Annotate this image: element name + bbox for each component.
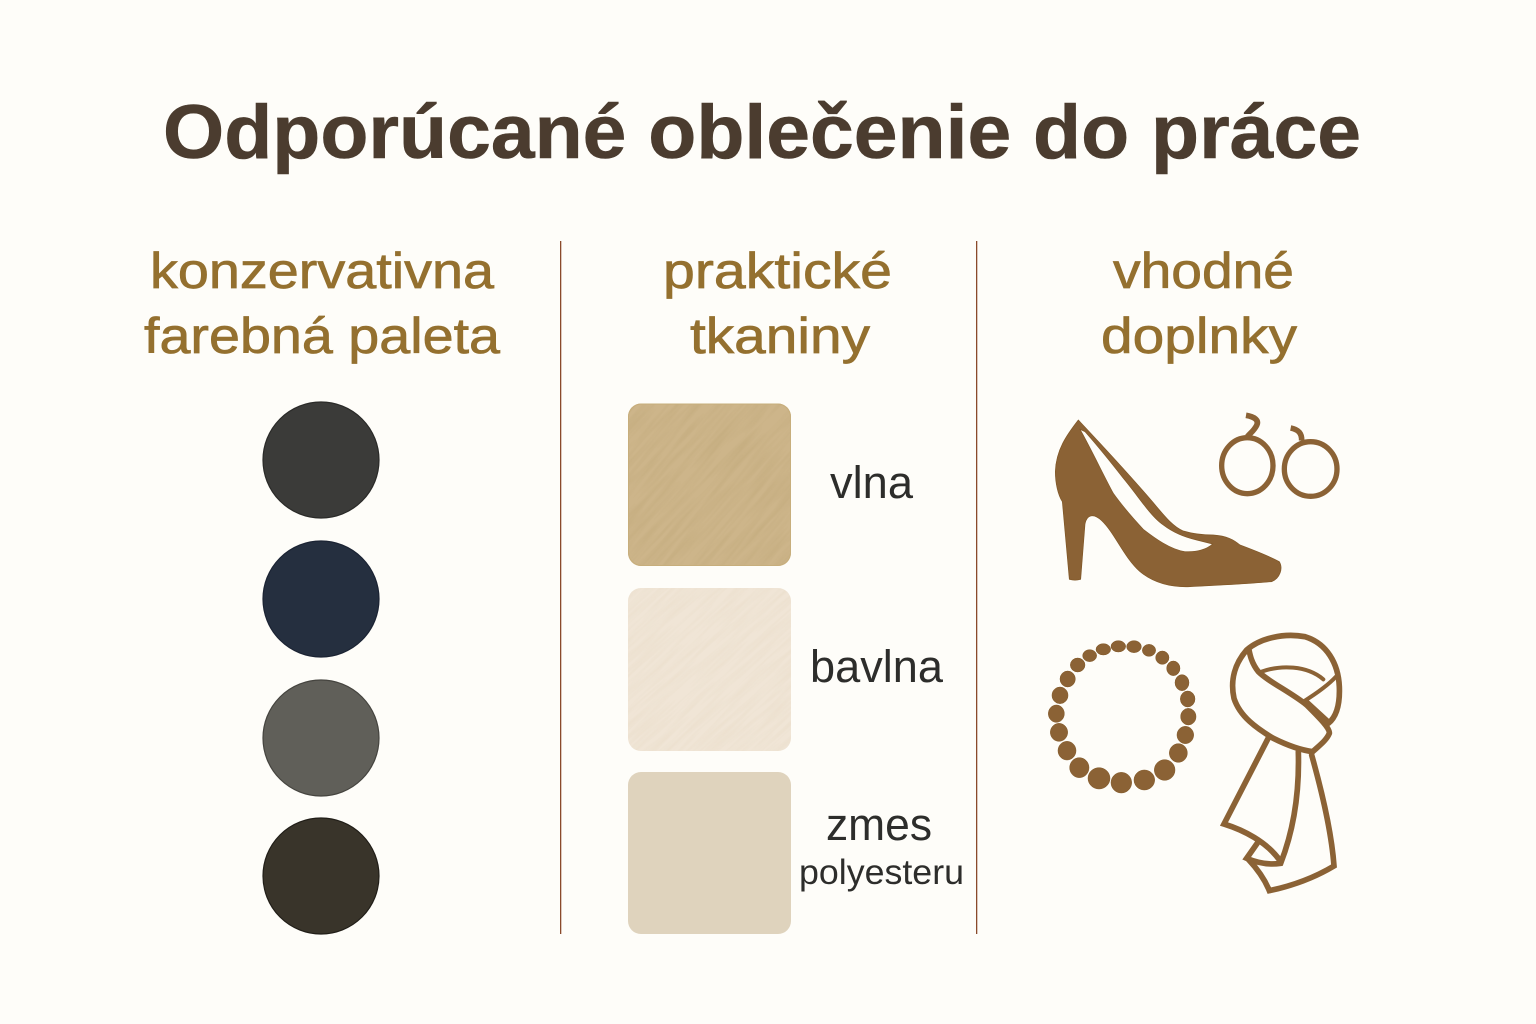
heading: konzervativna farebná paleta: konzervativna [150,243,494,299]
label: zmes polyesteru: polyesteru [799,853,964,892]
swatch: gray [263,680,379,796]
fabric swatch: wool [628,404,791,566]
heading: praktické tkaniny: tkaniny [690,308,870,364]
swatch: dark olive [263,818,379,934]
label: zmes polyesteru: zmes [826,799,932,850]
icon: bead necklace [1048,641,1196,793]
icon: high-heel shoe [1055,420,1281,587]
swatch: charcoal [263,402,379,518]
fabric swatch: polyester blend [628,772,791,934]
label: vlna: vlna [830,457,914,508]
label: zmes polyesteru [799,799,964,892]
heading: praktické tkaniny [663,243,892,364]
panel: fabrics [628,404,962,934]
swatch: navy [263,541,379,657]
heading: praktické tkaniny: praktické [663,243,892,299]
heading: konzervativna farebná paleta: farebná paleta [144,308,500,364]
icon: scarf [1224,635,1339,891]
heading: vhodné doplnky: doplnky [1101,308,1297,364]
fabric swatch: cotton [628,588,791,751]
panel: color palette [263,402,379,934]
heading: konzervativna farebná paleta [144,243,500,364]
icon: hoop earrings [1222,415,1337,496]
heading: vhodné doplnky [1101,243,1297,364]
divider right [976,241,977,934]
heading: vhodné doplnky: vhodné [1113,243,1294,299]
label: bavlna: bavlna [810,641,944,692]
divider left [560,241,561,934]
title: Odporúcané oblečenie do práce [163,90,1361,175]
